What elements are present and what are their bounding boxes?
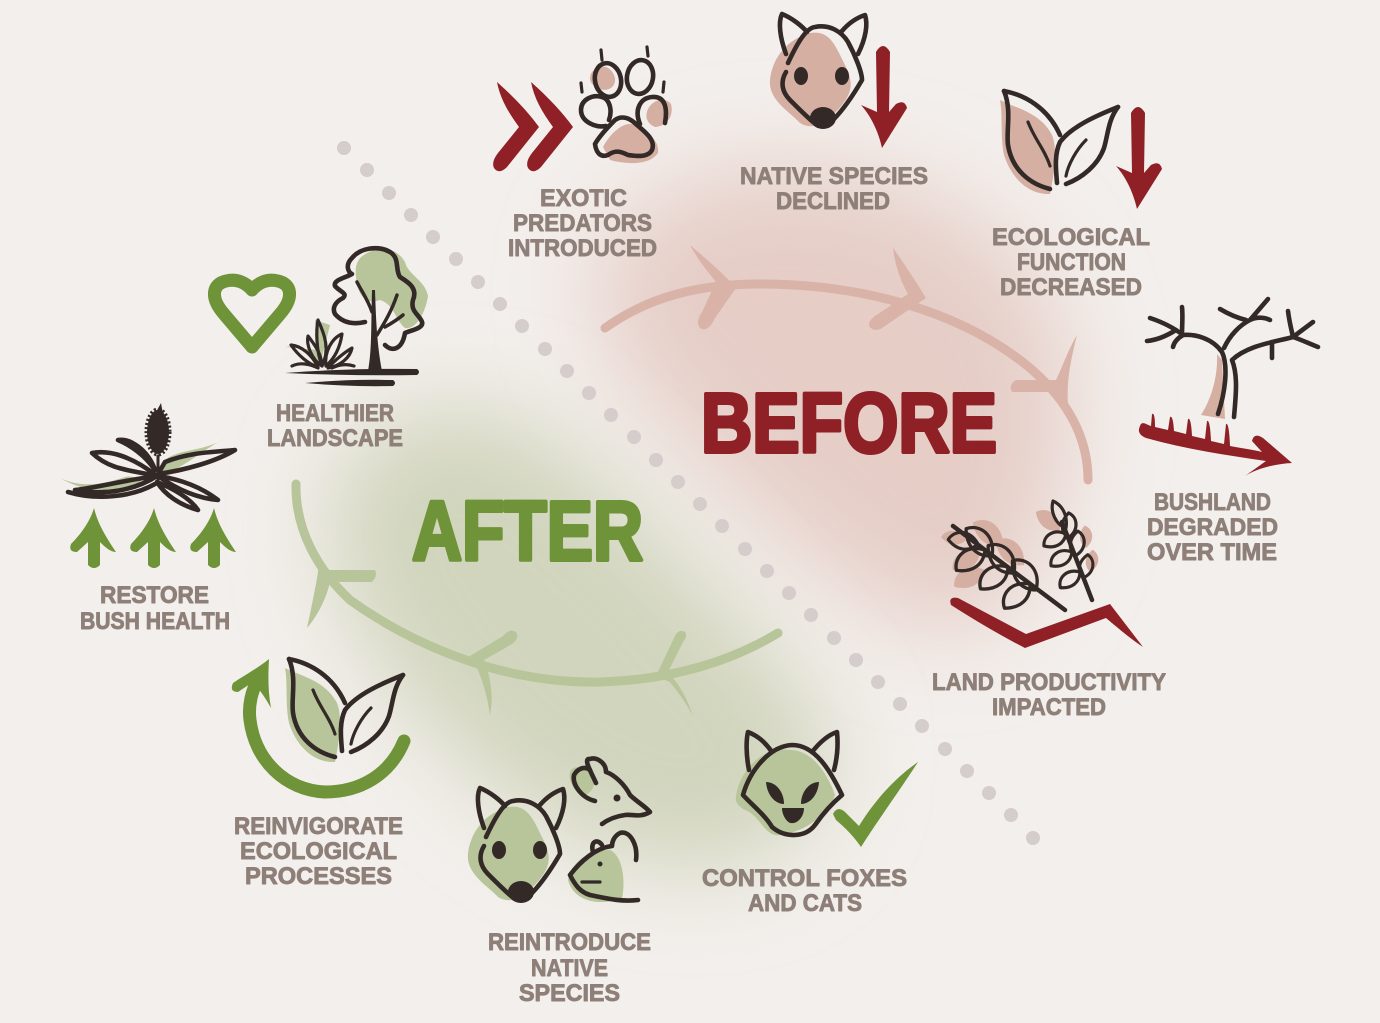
label: reintroduce native species: NATIVE <box>531 955 608 982</box>
label: land productivity impacted: LAND PRODUCTIVITY <box>932 669 1166 696</box>
icon: exotic predators <box>493 47 672 171</box>
icon: control foxes and cats <box>736 732 918 847</box>
label: reintroduce native species: REINTRODUCE <box>488 929 651 956</box>
label: exotic predators introduced: EXOTIC <box>540 185 627 212</box>
icon: native species declined <box>770 14 907 148</box>
heading: before: BEFORE <box>701 376 997 470</box>
label: native species declined <box>740 163 928 215</box>
arrow: after cycle <box>296 484 778 717</box>
label: ecological function decreased: ECOLOGICAL <box>992 224 1150 251</box>
icon: land productivity impacted <box>940 501 1143 648</box>
label: exotic predators introduced: INTRODUCED <box>508 235 657 262</box>
label: healthier landscape: LANDSCAPE <box>267 425 403 452</box>
icon: reinvigorate ecological processes <box>232 659 404 792</box>
label: control foxes and cats <box>702 865 907 917</box>
label: control foxes and cats: CONTROL FOXES <box>702 865 907 892</box>
label: native species declined: NATIVE SPECIES <box>740 163 928 190</box>
label: bushland degraded over time: BUSHLAND <box>1154 489 1271 516</box>
label: native species declined: DECLINED <box>776 188 890 215</box>
label: reinvigorate ecological processes <box>234 813 403 890</box>
label: bushland degraded over time <box>1147 489 1278 566</box>
label: land productivity impacted <box>932 669 1166 721</box>
label: restore bush health <box>80 582 230 635</box>
label: bushland degraded over time: OVER TIME <box>1147 539 1277 566</box>
label: control foxes and cats: AND CATS <box>748 890 862 917</box>
label: bushland degraded over time: DEGRADED <box>1147 514 1278 541</box>
label: reintroduce native species: SPECIES <box>519 980 620 1007</box>
label: exotic predators introduced: PREDATORS <box>513 210 652 237</box>
label: exotic predators introduced <box>508 185 657 262</box>
arrow: before cycle <box>605 245 1088 480</box>
icon: bushland degraded <box>1139 299 1318 476</box>
icon: reintroduce native species <box>468 759 650 903</box>
label: healthier landscape: HEALTHIER <box>276 400 394 427</box>
icon: healthier landscape <box>214 248 428 386</box>
label: reinvigorate ecological processes: ECOLOGICAL <box>240 838 397 865</box>
label: ecological function decreased: DECREASED <box>1000 274 1142 301</box>
after glow <box>330 408 833 871</box>
dotted divider <box>337 141 1040 845</box>
label: land productivity impacted: IMPACTED <box>992 694 1106 721</box>
before glow <box>595 165 1070 634</box>
label: reintroduce native species <box>488 929 651 1007</box>
icon: restore bush health <box>60 403 236 568</box>
label: restore bush health: RESTORE <box>100 582 209 609</box>
label: healthier landscape <box>267 400 403 452</box>
label: restore bush health: BUSH HEALTH <box>80 608 230 635</box>
label: reinvigorate ecological processes: REINVIGORATE <box>234 813 403 840</box>
label: ecological function decreased <box>992 224 1150 301</box>
icon: ecological function decreased <box>1000 91 1162 209</box>
label: ecological function decreased: FUNCTION <box>1017 249 1126 276</box>
label: reinvigorate ecological processes: PROCESSES <box>245 863 392 890</box>
heading: after: AFTER <box>412 484 643 578</box>
